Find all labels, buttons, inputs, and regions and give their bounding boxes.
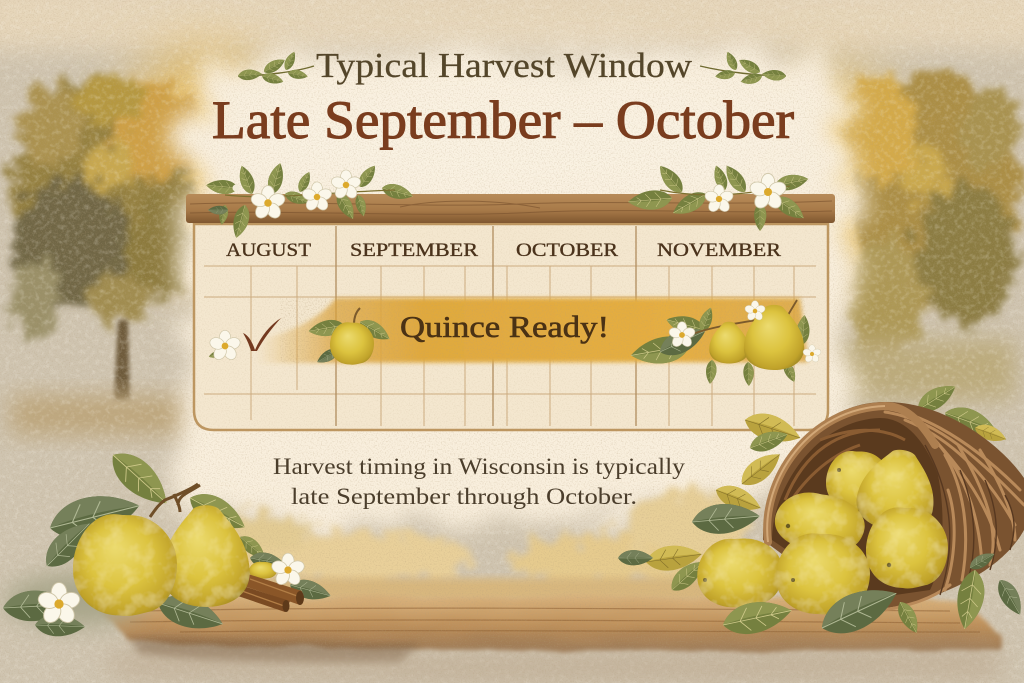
cinnamon sticks [238, 574, 304, 612]
calendar grid [204, 226, 816, 426]
month labels: SEPTEMBER [350, 241, 479, 261]
leaves behind basket [618, 378, 1009, 597]
golden hedge [210, 489, 750, 586]
heading: late september to october: Late September – October [212, 90, 794, 150]
icon: blossoms on board right [627, 161, 810, 231]
basket body [763, 402, 1024, 612]
left orchard tree [10, 50, 290, 435]
leaves in front of basket [720, 549, 1024, 644]
caption text: late September through October. [291, 484, 637, 509]
icon: blossom beside check [208, 330, 242, 362]
band label: Quince Ready! [400, 309, 609, 344]
wooden board [186, 194, 835, 223]
decorative sprig right [700, 50, 786, 86]
wooden table [95, 596, 1000, 683]
icon: quinces and blossoms on band [629, 300, 822, 386]
calendar sheet [194, 224, 828, 430]
month labels: AUGUST [226, 241, 311, 261]
caption text [273, 454, 686, 509]
illustration: basket of quinces [618, 378, 1024, 644]
basket interior [772, 418, 943, 600]
caption text: Harvest timing in Wisconsin is typically [273, 454, 686, 479]
leaves left cluster [2, 443, 333, 638]
decorative sprig left [238, 50, 314, 86]
basket weave [860, 407, 1024, 610]
title block [212, 46, 794, 150]
quinces in basket [695, 444, 948, 614]
blossoms [36, 583, 82, 626]
icon: check mark [243, 318, 281, 351]
panel: harvest calendar [186, 161, 835, 430]
icon: blossoms on board left [205, 161, 415, 240]
month labels: OCTOBER [516, 241, 619, 261]
small quince behind sticks [249, 562, 277, 579]
pear quince [162, 485, 250, 607]
heading: typical harvest window: Typical Harvest Window [316, 46, 693, 85]
round quince [73, 484, 198, 616]
harvest highlight band [256, 298, 808, 363]
illustration: quinces left [2, 443, 333, 638]
cream centre wash [172, 58, 862, 528]
right orchard tree [770, 70, 1020, 400]
icon: small quince on band [307, 308, 393, 367]
month labels: NOVEMBER [657, 241, 782, 261]
month labels [226, 241, 782, 261]
basket rim [767, 406, 935, 542]
